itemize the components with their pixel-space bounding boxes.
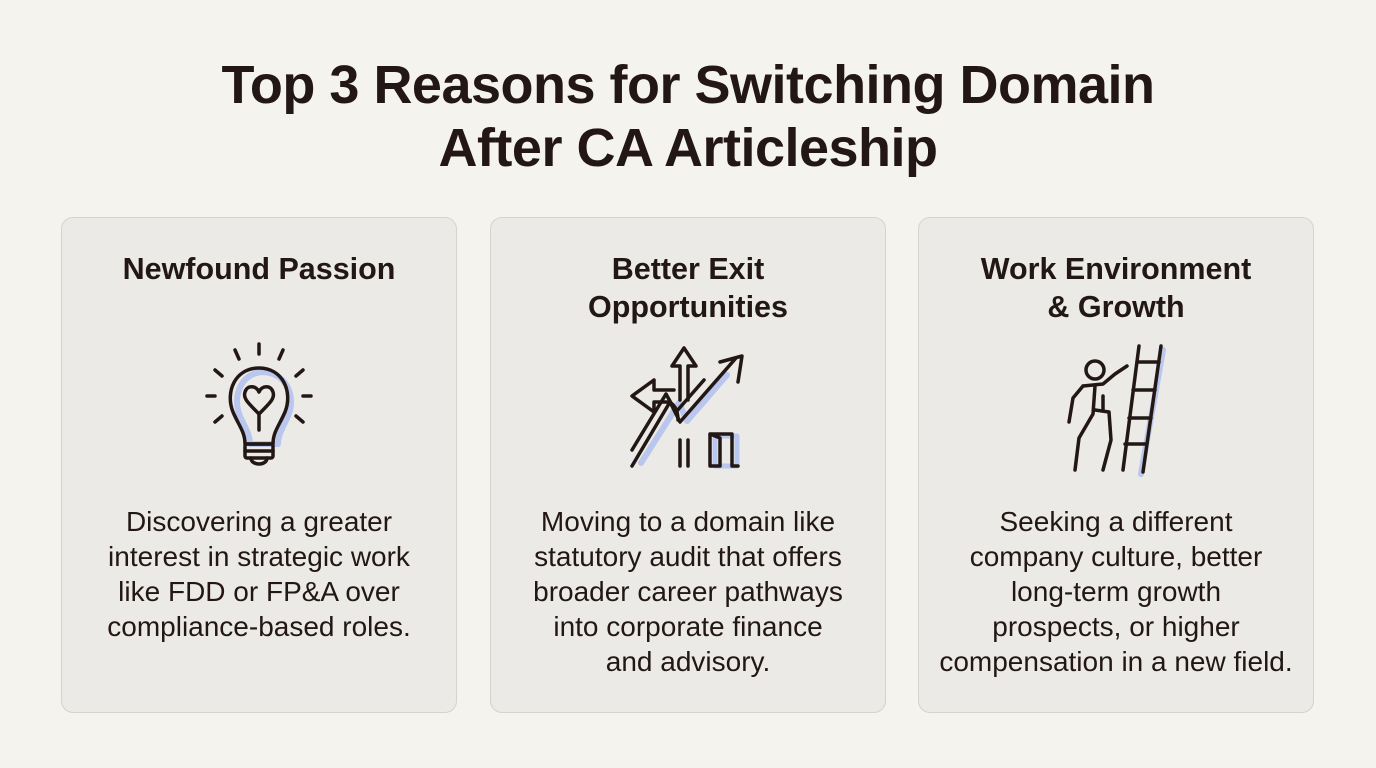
text: description: long-term growth <box>1011 576 1221 607</box>
text: description: Discovering a greater <box>126 506 392 537</box>
heading: Opportunities <box>588 290 788 324</box>
text: description <box>107 506 411 642</box>
text: description: interest in strategic work <box>108 541 410 572</box>
heading: Newfound Passion <box>123 252 395 286</box>
heading <box>588 252 788 324</box>
text: description: company culture, better <box>970 541 1262 572</box>
text: description: compensation in a new field. <box>939 646 1293 677</box>
text: description: Moving to a domain like <box>541 506 835 537</box>
panel: better exit opportunities <box>490 217 886 713</box>
title: After CA Articleship <box>438 118 938 178</box>
text: description <box>533 506 843 677</box>
text: description: compliance-based roles. <box>107 611 411 642</box>
heading: Work Environment <box>981 252 1251 286</box>
text: description: broader career pathways <box>533 576 843 607</box>
text: description: and advisory. <box>606 646 770 677</box>
icon: arrows and door <box>630 346 744 468</box>
heading: & Growth <box>1047 290 1185 324</box>
heading: Better Exit <box>612 252 764 286</box>
heading <box>980 252 1251 324</box>
icon: lightbulb with heart <box>205 342 313 466</box>
panel: work environment & growth <box>918 217 1314 713</box>
title <box>221 55 1155 178</box>
text: description: like FDD or FP&A over <box>118 576 400 607</box>
text: description: into corporate finance <box>553 611 823 642</box>
text: description <box>939 506 1293 677</box>
icon: person climbing ladder <box>1067 344 1166 477</box>
text: description: prospects, or higher <box>992 611 1240 642</box>
text: description: statutory audit that offers <box>534 541 842 572</box>
title: Top 3 Reasons for Switching Domain <box>221 55 1155 115</box>
panel: newfound passion <box>61 217 457 713</box>
text: description: Seeking a different <box>1000 506 1232 537</box>
